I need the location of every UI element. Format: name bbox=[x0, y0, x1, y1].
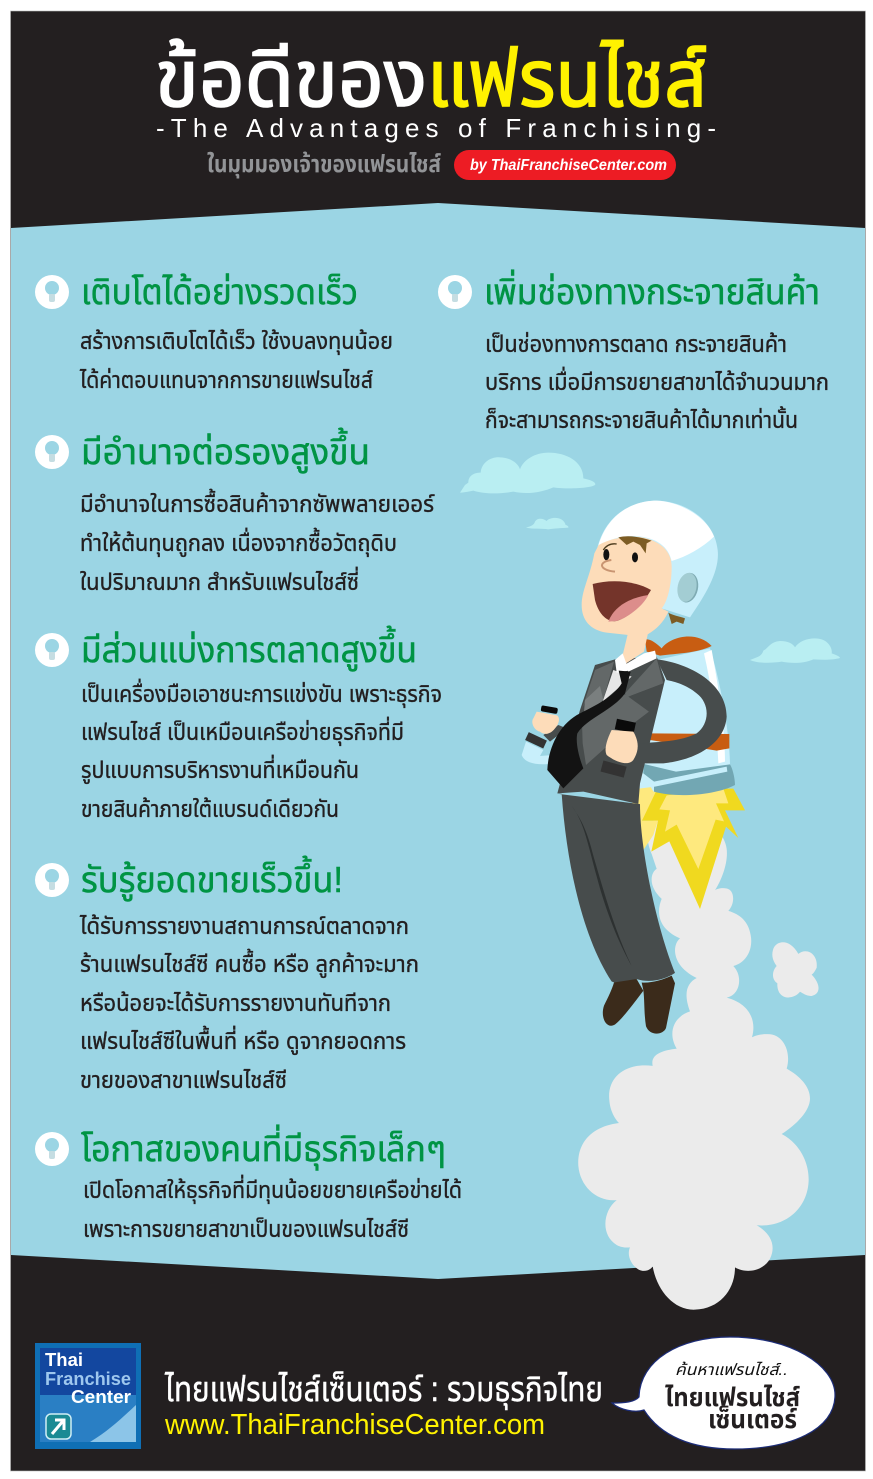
clouds bbox=[460, 453, 840, 663]
footer text: ไทยแฟรนไชส์เซ็นเตอร์ : รวมธุรกิจไทย bbox=[164, 1370, 603, 1410]
body text bbox=[79, 913, 419, 1093]
title block bbox=[155, 34, 716, 180]
neck bbox=[623, 632, 648, 663]
icon: light bulb bbox=[35, 633, 69, 667]
body text bbox=[485, 331, 829, 433]
footer logo: Franchise bbox=[45, 1369, 131, 1389]
subtitle: -The Advantages of Franchising- bbox=[156, 113, 716, 143]
red badge bbox=[454, 150, 676, 180]
speech bubble: ค้นหาแฟรนไชส์.. bbox=[675, 1361, 788, 1379]
body text: มีอำนาจในการซื้อสินค้าจากซัพพลายเออร์ bbox=[80, 488, 435, 517]
icon: arrow bbox=[46, 1414, 71, 1439]
body text: เพราะการขยายสาขาเป็นของแฟรนไชส์ซี bbox=[83, 1216, 409, 1242]
body text: ทำให้ต้นทุนถูกลง เนื่องจากซื้อวัตถุดิบ bbox=[80, 527, 397, 558]
helmet bbox=[593, 501, 718, 617]
section: sales feedback bbox=[35, 855, 419, 1093]
body text bbox=[83, 1174, 462, 1242]
body text: ร้านแฟรนไชส์ซี คนซื้อ หรือ ลูกค้าจะมาก bbox=[80, 948, 419, 979]
shirt collar bbox=[603, 651, 657, 702]
trousers and shoes bbox=[557, 794, 675, 1034]
smoke puff bbox=[772, 942, 819, 997]
hair at neck bbox=[668, 613, 685, 624]
heading: เพิ่มช่องทางกระจายสินค้า bbox=[484, 269, 820, 312]
body text: ได้ค่าตอบแทนจากการขายแฟรนไชส์ bbox=[79, 367, 373, 393]
icon: light bulb bbox=[35, 435, 69, 469]
body text: บริการ เมื่อมีการขยายสาขาได้จำนวนมาก bbox=[485, 366, 829, 395]
body text: เปิดโอกาสให้ธุรกิจที่มีทุนน้อยขยายเครือข่ายได้ bbox=[83, 1174, 462, 1204]
footer logo bbox=[35, 1343, 141, 1449]
title: แฟรนไชส์ bbox=[427, 34, 707, 123]
heading: รับรู้ยอดขายเร็วขึ้น! bbox=[81, 855, 343, 901]
body text: เป็นเครื่องมือเอาชนะการแข่งขัน เพราะธุรกิจ bbox=[81, 678, 442, 708]
icon: light bulb bbox=[35, 863, 69, 897]
body text: หรือน้อยจะได้รับการรายงานทันทีจาก bbox=[80, 990, 391, 1016]
body text: เป็นช่องทางการตลาด กระจายสินค้า bbox=[485, 331, 787, 357]
speech bubble bbox=[612, 1337, 835, 1449]
body text: ขายสินค้าภายใต้แบรนด์เดียวกัน bbox=[81, 796, 339, 822]
jacket bbox=[557, 657, 665, 804]
right hand bbox=[601, 719, 638, 778]
body text bbox=[80, 488, 435, 595]
heading: มีอำนาจต่อรองสูงขึ้น bbox=[81, 427, 370, 473]
body text: ในปริมาณมาก สำหรับแฟรนไชส์ซี่ bbox=[80, 566, 359, 595]
section: bargaining power bbox=[35, 427, 435, 595]
icon: light bulb bbox=[35, 275, 69, 309]
heading: เติบโตได้อย่างรวดเร็ว bbox=[81, 271, 358, 312]
footer logo: Thai bbox=[45, 1350, 83, 1370]
body text bbox=[81, 678, 442, 822]
flames bbox=[631, 773, 745, 909]
arm bbox=[633, 659, 727, 763]
section: distribution channels bbox=[438, 269, 829, 433]
speech bubble: ไทยแฟรนไชส์ bbox=[665, 1382, 800, 1412]
heading: มีส่วนแบ่งการตลาดสูงขึ้น bbox=[81, 625, 417, 671]
body text: แฟรนไชส์ซีในพื้นที่ หรือ ดูจากยอดการ bbox=[80, 1025, 406, 1056]
section: market share bbox=[35, 625, 442, 822]
panel: light blue content area bbox=[11, 203, 865, 1279]
speech bubble: เซ็นเตอร์ bbox=[708, 1404, 797, 1434]
title: ข้อดีของ bbox=[155, 34, 427, 123]
body text: แฟรนไชส์ เป็นเหมือนเครือข่ายธุรกิจที่มี bbox=[81, 716, 404, 746]
tagline: ในมุมมองเจ้าของแฟรนไชส์ bbox=[207, 150, 441, 179]
face bbox=[582, 536, 672, 635]
title bbox=[155, 34, 707, 123]
left hand bbox=[522, 705, 567, 764]
body text bbox=[79, 328, 393, 393]
icon: light bulb bbox=[35, 1132, 69, 1166]
heading: โอกาสของคนที่มีธุรกิจเล็กๆ bbox=[81, 1124, 446, 1170]
body text: ได้รับการรายงานสถานการณ์ตลาดจาก bbox=[79, 913, 409, 939]
section: fast growth bbox=[35, 271, 393, 393]
body text: ก็จะสามารถกระจายสินค้าได้มากเท่านั้น bbox=[485, 405, 798, 433]
smoke trail bbox=[578, 820, 819, 1310]
tie bbox=[547, 671, 631, 788]
footer text: www.ThaiFranchiseCenter.com bbox=[164, 1409, 545, 1441]
jetpack man illustration bbox=[522, 501, 745, 1034]
body text: สร้างการเติบโตได้เร็ว ใช้งบลงทุนน้อย bbox=[80, 328, 393, 355]
jetpack bbox=[602, 637, 735, 795]
red badge: by ThaiFranchiseCenter.com bbox=[470, 157, 667, 174]
body text: ขายของสาขาแฟรนไชส์ซี bbox=[80, 1067, 287, 1093]
icon: light bulb bbox=[438, 275, 472, 309]
footer logo: Center bbox=[71, 1387, 131, 1407]
footer text bbox=[164, 1370, 603, 1441]
section: small business opportunity bbox=[35, 1124, 462, 1242]
body text: รูปแบบการบริหารงานที่เหมือนกัน bbox=[81, 754, 359, 785]
